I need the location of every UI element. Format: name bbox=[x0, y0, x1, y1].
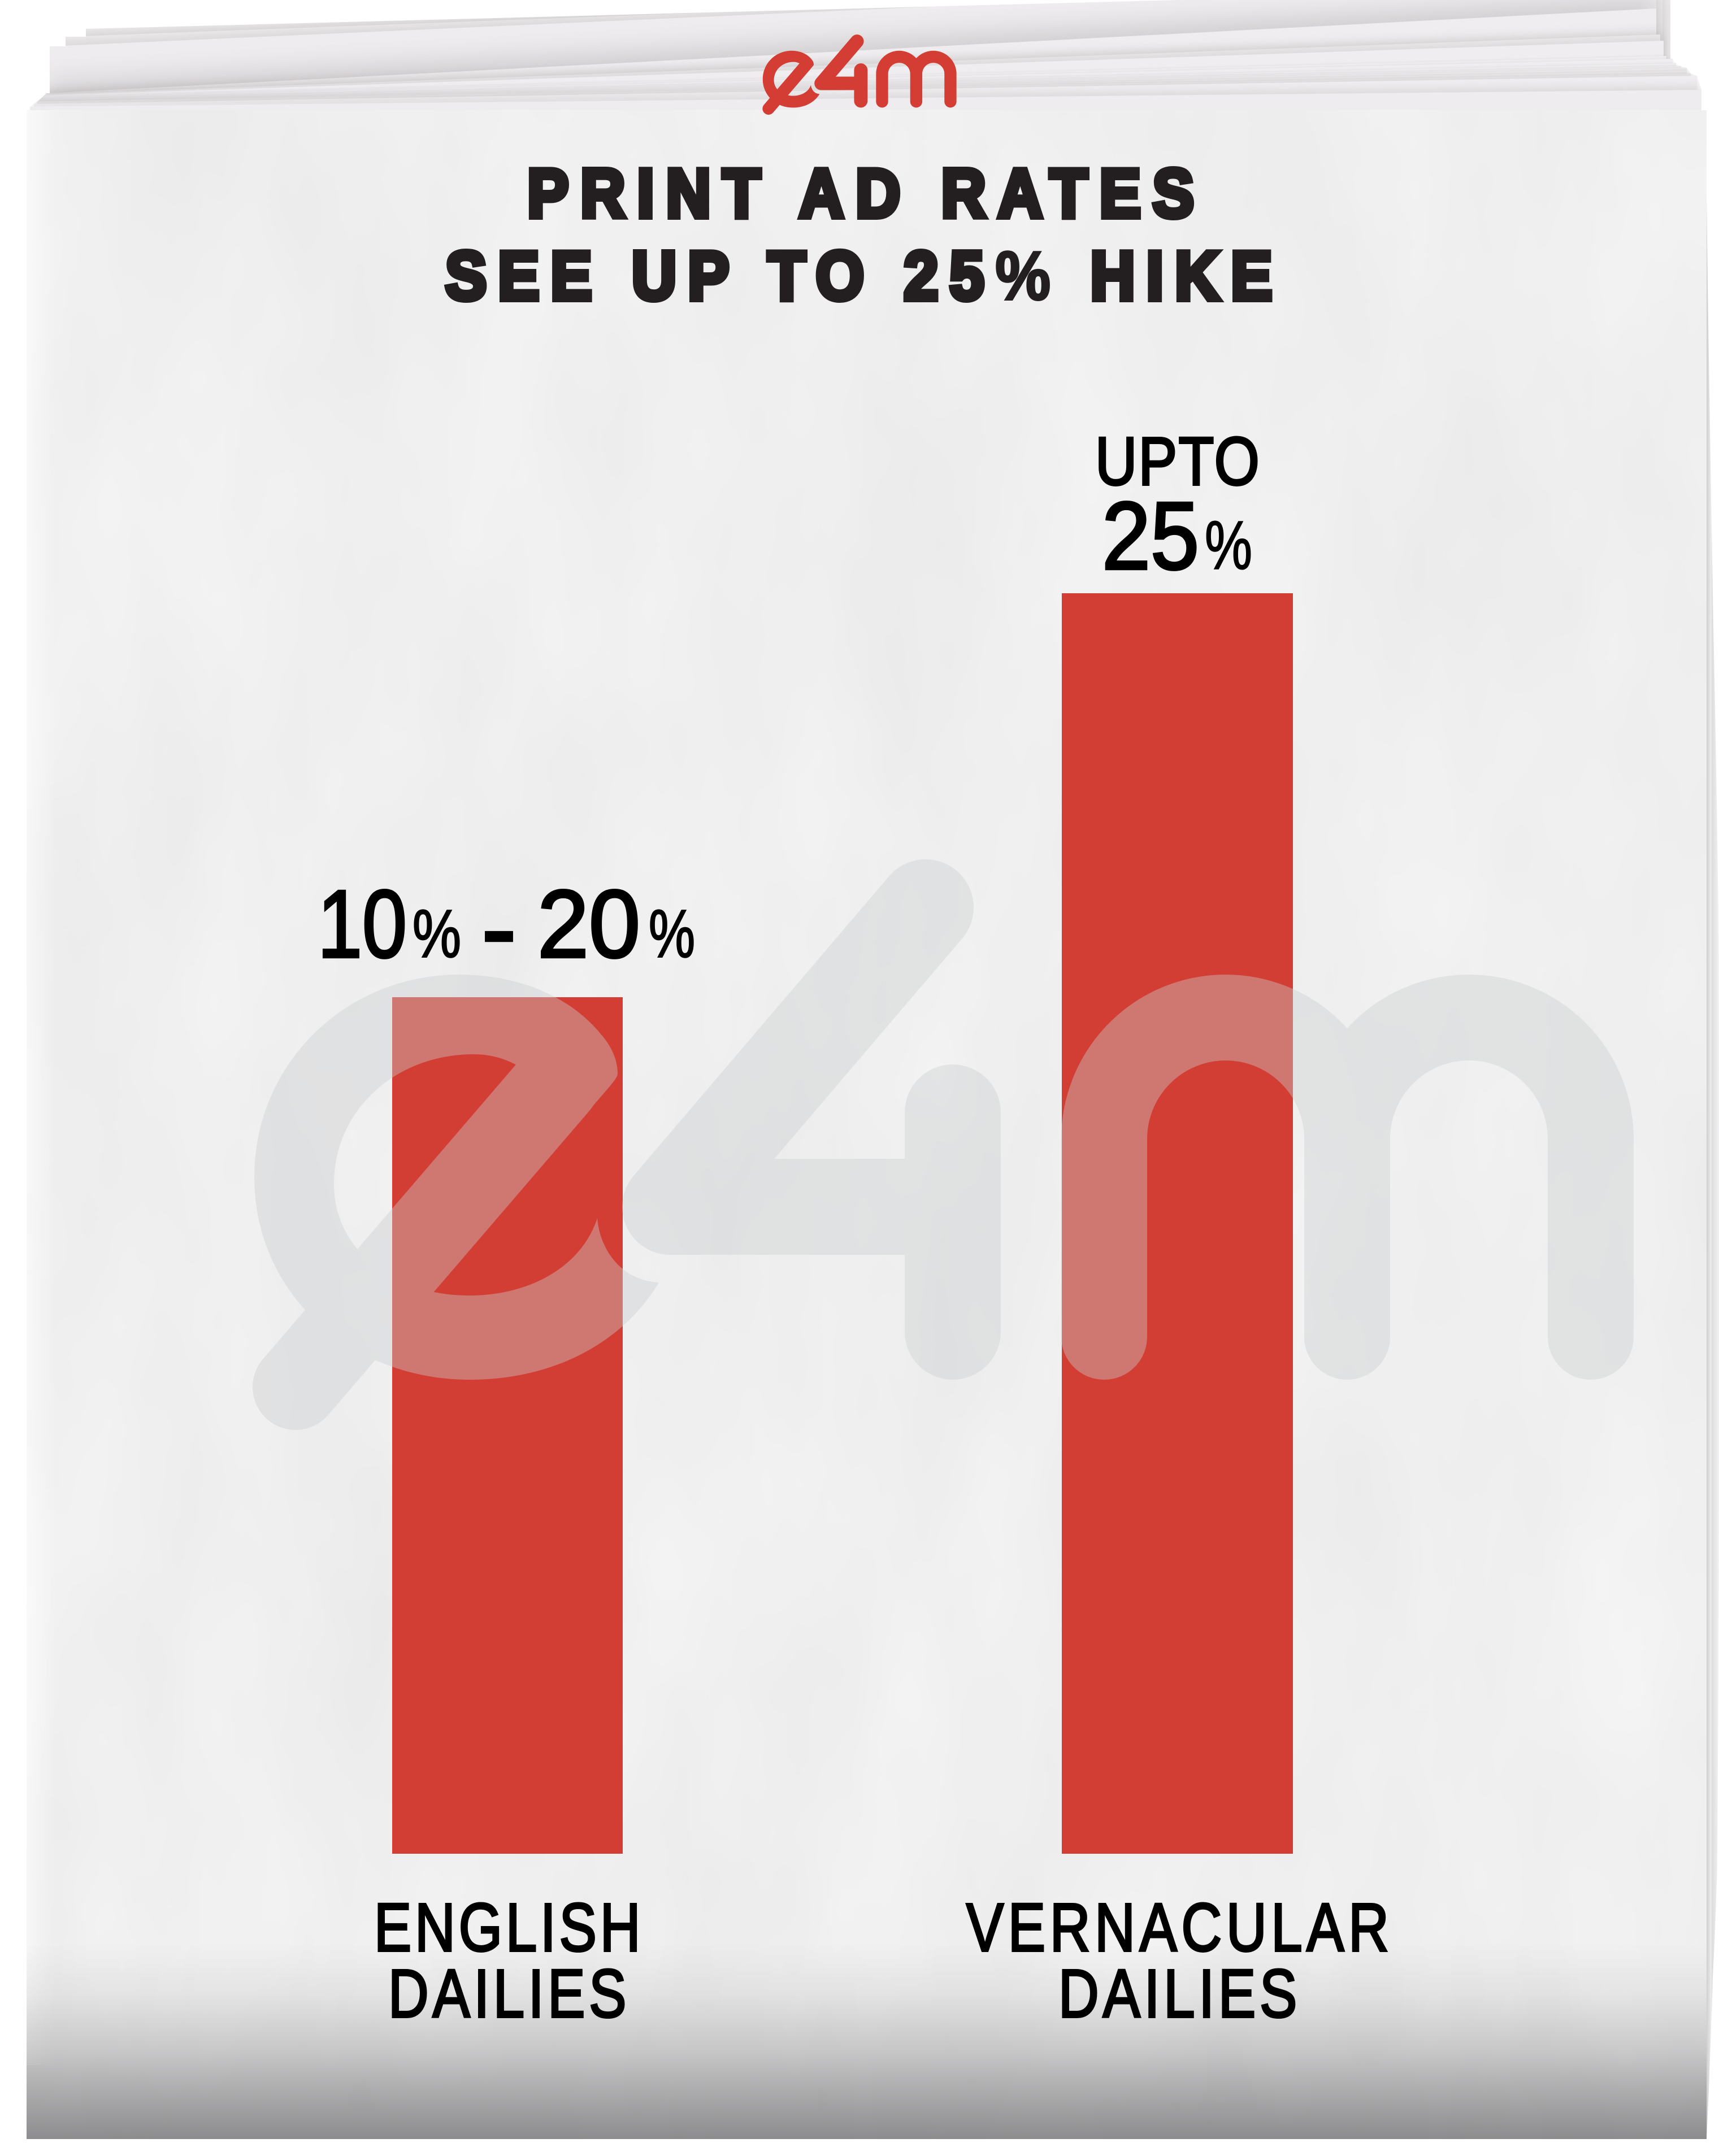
value label: 10% - 20% bbox=[318, 868, 695, 988]
category label: Vernacular dailies: DAILIES bbox=[1058, 1956, 1297, 2032]
watermark logo: e4m bbox=[254, 907, 1591, 1387]
value label: upto 25% bbox=[1095, 423, 1260, 590]
category label: English dailies: ENGLISH bbox=[374, 1890, 640, 1966]
value label: 10% - 20%: % bbox=[413, 896, 461, 972]
category label: English dailies bbox=[374, 1890, 641, 2032]
bar chart bbox=[392, 593, 1293, 1854]
value label: upto 25%: UPTO bbox=[1095, 423, 1260, 499]
value label: 10% - 20%: 20 bbox=[537, 871, 640, 978]
title: PRINT AD RATES bbox=[527, 155, 1194, 232]
category label: Vernacular dailies bbox=[966, 1890, 1389, 2032]
value label: 10% - 20%: - bbox=[481, 868, 516, 988]
logo: e4m header bbox=[763, 41, 950, 108]
title: SEE UP TO 25% HIKE bbox=[445, 237, 1272, 314]
value label: 10% - 20%: % bbox=[649, 896, 695, 972]
stacked back pages bbox=[30, 0, 1701, 111]
value label: upto 25%: % bbox=[1205, 507, 1252, 584]
value label: upto 25%: 25 bbox=[1102, 483, 1199, 590]
category label: English dailies: DAILIES bbox=[388, 1956, 626, 2032]
title bbox=[445, 155, 1272, 314]
bar: English dailies bbox=[392, 997, 623, 1854]
back sheets bulging at right edge bbox=[1705, 110, 1719, 2139]
value label: 10% - 20%: 10 bbox=[318, 871, 407, 978]
bar: Vernacular dailies bbox=[1062, 593, 1293, 1854]
category label: Vernacular dailies: VERNACULAR bbox=[966, 1890, 1389, 1966]
